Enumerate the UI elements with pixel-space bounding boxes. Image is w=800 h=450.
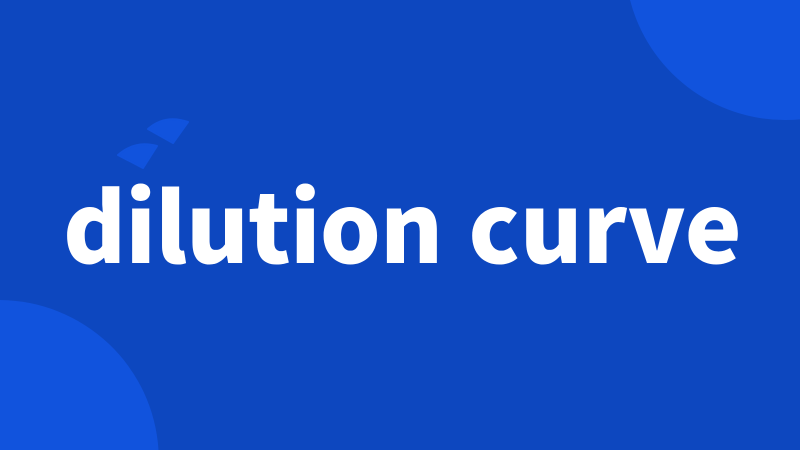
circle: top right <box>630 0 800 120</box>
circle: bottom left <box>0 300 158 450</box>
icon: logo wedges <box>118 119 188 168</box>
title: dilution curve <box>63 152 742 291</box>
